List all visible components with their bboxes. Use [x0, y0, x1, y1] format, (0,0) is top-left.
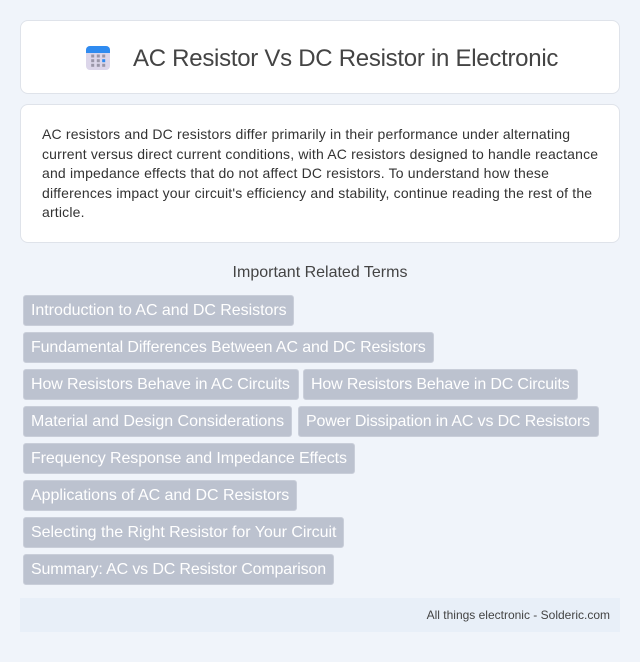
chip — [23, 332, 434, 363]
intro paragraph: article. — [42, 204, 85, 220]
title: AC Resistor Vs DC Resistor in Electronic — [133, 45, 558, 72]
intro paragraph: differences impact your circuit's efficiency and stability, continue reading the rest of the — [42, 185, 592, 201]
chip: Frequency Response and Impedance Effects — [31, 450, 347, 467]
intro paragraph: and impedance effects that do not affect DC resistors. To understand how these — [42, 165, 549, 181]
chip — [23, 480, 297, 511]
chip — [303, 369, 578, 400]
chip — [23, 369, 299, 400]
intro paragraph: AC resistors and DC resistors differ primarily in their performance under alternating — [42, 126, 570, 142]
chip — [23, 443, 355, 474]
chip: How Resistors Behave in DC Circuits — [311, 376, 569, 393]
title card — [20, 20, 620, 94]
intro paragraph — [42, 126, 598, 220]
chip: Power Dissipation in AC vs DC Resistors — [306, 413, 590, 430]
footer bar — [20, 598, 620, 632]
related terms heading: Important Related Terms — [233, 264, 407, 281]
chip: Fundamental Differences Between AC and DC Resistors — [31, 339, 426, 356]
intro text panel — [20, 104, 620, 243]
chip: How Resistors Behave in AC Circuits — [31, 376, 290, 393]
chip: Introduction to AC and DC Resistors — [31, 302, 287, 319]
chip — [23, 517, 344, 548]
intro paragraph: current versus direct current conditions, with AC resistors designed to handle reactance — [42, 146, 598, 162]
chip — [23, 554, 334, 585]
chip: Selecting the Right Resistor for Your Circuit — [31, 524, 336, 541]
chip — [298, 406, 599, 437]
chip — [23, 406, 292, 437]
chip: Summary: AC vs DC Resistor Comparison — [31, 561, 326, 578]
icon: calendar — [86, 46, 110, 70]
chip — [23, 295, 294, 326]
footer credit: All things electronic - Solderic.com — [427, 608, 610, 622]
chip: Applications of AC and DC Resistors — [31, 487, 289, 504]
chip: Material and Design Considerations — [31, 413, 284, 430]
